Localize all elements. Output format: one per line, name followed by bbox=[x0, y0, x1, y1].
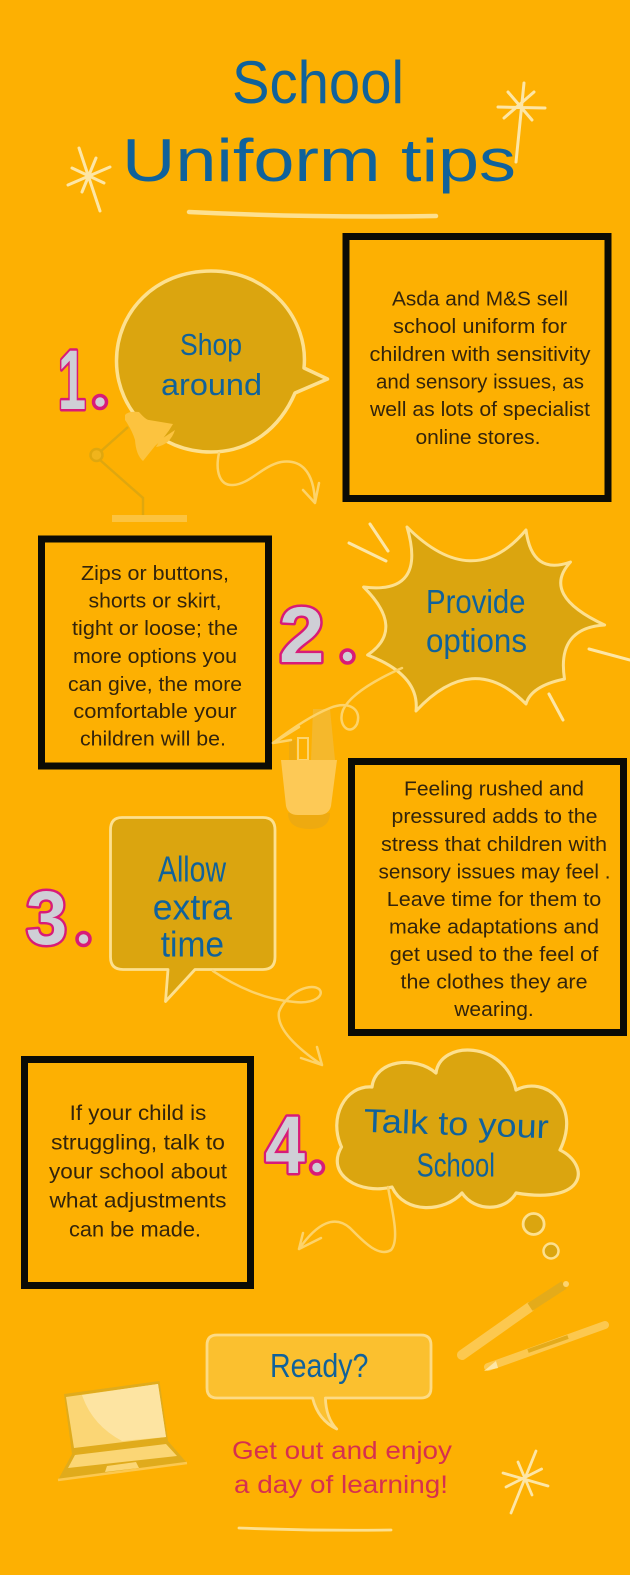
panel: tip 4 text box: struggling, talk to bbox=[51, 1131, 225, 1154]
icon: lamp shade bbox=[125, 412, 175, 461]
closing message: a day of learning! bbox=[234, 1471, 448, 1499]
burst rays bbox=[349, 524, 630, 720]
title: Uniform tips bbox=[122, 127, 516, 194]
thought cloud: talk to your school: Talk to your bbox=[363, 1102, 549, 1145]
closing message bbox=[232, 1437, 453, 1499]
panel: tip 1 text box bbox=[346, 236, 608, 498]
panel: tip 2 text box: children will be. bbox=[80, 728, 226, 750]
arrow: tip 3 to tip 4 bbox=[213, 971, 322, 1065]
panel: tip 2 text box: can give, the more bbox=[68, 674, 242, 696]
panel: tip 2 text box: shorts or skirt, bbox=[88, 591, 222, 613]
closing message: Get out and enjoy bbox=[232, 1437, 453, 1465]
bottom underline bbox=[239, 1528, 391, 1530]
starburst bubble: provide options bbox=[364, 527, 605, 711]
starburst bubble: provide options: Provide bbox=[426, 583, 526, 620]
number 1: 1 bbox=[58, 333, 86, 427]
speech bubble: allow extra time: Allow bbox=[158, 849, 227, 890]
panel: tip 1 text box: online stores. bbox=[416, 427, 540, 449]
panel: tip 3 text box: Leave time for them to bbox=[387, 889, 601, 911]
panel: tip 2 text box: comfortable your bbox=[73, 701, 237, 723]
speech bubble: shop around bbox=[116, 271, 328, 452]
panel: tip 2 text box: Zips or buttons, bbox=[81, 563, 229, 585]
speech bubble: allow extra time: time bbox=[161, 924, 224, 965]
number 2: 2 bbox=[279, 591, 324, 679]
panel: tip 2 text box: tight or loose; the bbox=[72, 618, 238, 640]
speech bubble: shop around: around bbox=[161, 367, 262, 402]
arrow: tip 2 to tip 3 bbox=[273, 668, 402, 743]
panel: tip 1 text box: children with sensitivity bbox=[370, 344, 590, 366]
icon: sparkle left of title bbox=[68, 148, 110, 211]
arrow: tip 4 to box bbox=[299, 1187, 395, 1252]
icon: sparkle top right bbox=[498, 83, 545, 162]
panel: tip 4 text box: your school about bbox=[49, 1160, 227, 1183]
icon: laptop bbox=[58, 1381, 187, 1480]
panel: tip 3 text box bbox=[352, 762, 624, 1032]
arrow: tip 1 to tip 2 bbox=[218, 453, 319, 503]
panel: tip 4 text box: can be made. bbox=[69, 1219, 201, 1242]
panel: tip 3 text box: pressured adds to the bbox=[392, 806, 598, 828]
panel: tip 1 text box: well as lots of specialist bbox=[369, 399, 590, 421]
speech bubble: ready bbox=[207, 1335, 431, 1429]
panel: tip 3 text box: stress that children with bbox=[381, 834, 607, 856]
starburst bubble: provide options: options bbox=[426, 622, 527, 659]
icon: pencil cup bbox=[281, 709, 337, 829]
number 3: 3 bbox=[26, 875, 67, 960]
panel: tip 4 text box: If your child is bbox=[70, 1102, 206, 1125]
panel: tip 3 text box: Feeling rushed and bbox=[404, 778, 584, 800]
panel: tip 1 text box: Asda and M&S sell bbox=[392, 288, 568, 310]
icon: desk lamp bbox=[90, 427, 187, 522]
number 1 bbox=[58, 333, 106, 427]
thought cloud: talk to your school: School bbox=[417, 1147, 495, 1184]
speech bubble: ready: Ready? bbox=[270, 1347, 368, 1384]
speech bubble: shop around: Shop bbox=[180, 327, 242, 362]
icon: sparkle bottom right bbox=[503, 1451, 548, 1513]
number 4 bbox=[265, 1100, 324, 1191]
panel: tip 3 text box: the clothes they are bbox=[400, 972, 588, 994]
panel: tip 2 text box bbox=[42, 539, 268, 766]
panel: tip 1 text box: and sensory issues, as bbox=[376, 372, 584, 394]
panel: tip 3 text box: make adaptations and bbox=[389, 917, 599, 939]
thought cloud: talk to your school bbox=[337, 1050, 578, 1258]
number 4: 4 bbox=[265, 1100, 305, 1191]
panel: tip 4 text box: what adjustments bbox=[48, 1190, 226, 1213]
speech bubble: allow extra time: extra bbox=[153, 886, 233, 928]
number 2 bbox=[279, 591, 354, 679]
icon: pens bbox=[462, 1281, 605, 1371]
title underline bbox=[189, 212, 436, 216]
panel: tip 3 text box: wearing. bbox=[453, 999, 534, 1021]
title bbox=[122, 49, 516, 194]
panel: tip 3 text box: get used to the feel of bbox=[390, 944, 599, 966]
title: School bbox=[232, 49, 404, 116]
panel: tip 2 text box: more options you bbox=[73, 646, 237, 668]
panel: tip 1 text box: school uniform for bbox=[393, 316, 567, 338]
panel: tip 3 text box: sensory issues may feel . bbox=[378, 862, 610, 884]
panel: tip 4 text box bbox=[24, 1060, 250, 1286]
number 3 bbox=[26, 875, 90, 960]
speech bubble: allow extra time bbox=[110, 818, 275, 1002]
